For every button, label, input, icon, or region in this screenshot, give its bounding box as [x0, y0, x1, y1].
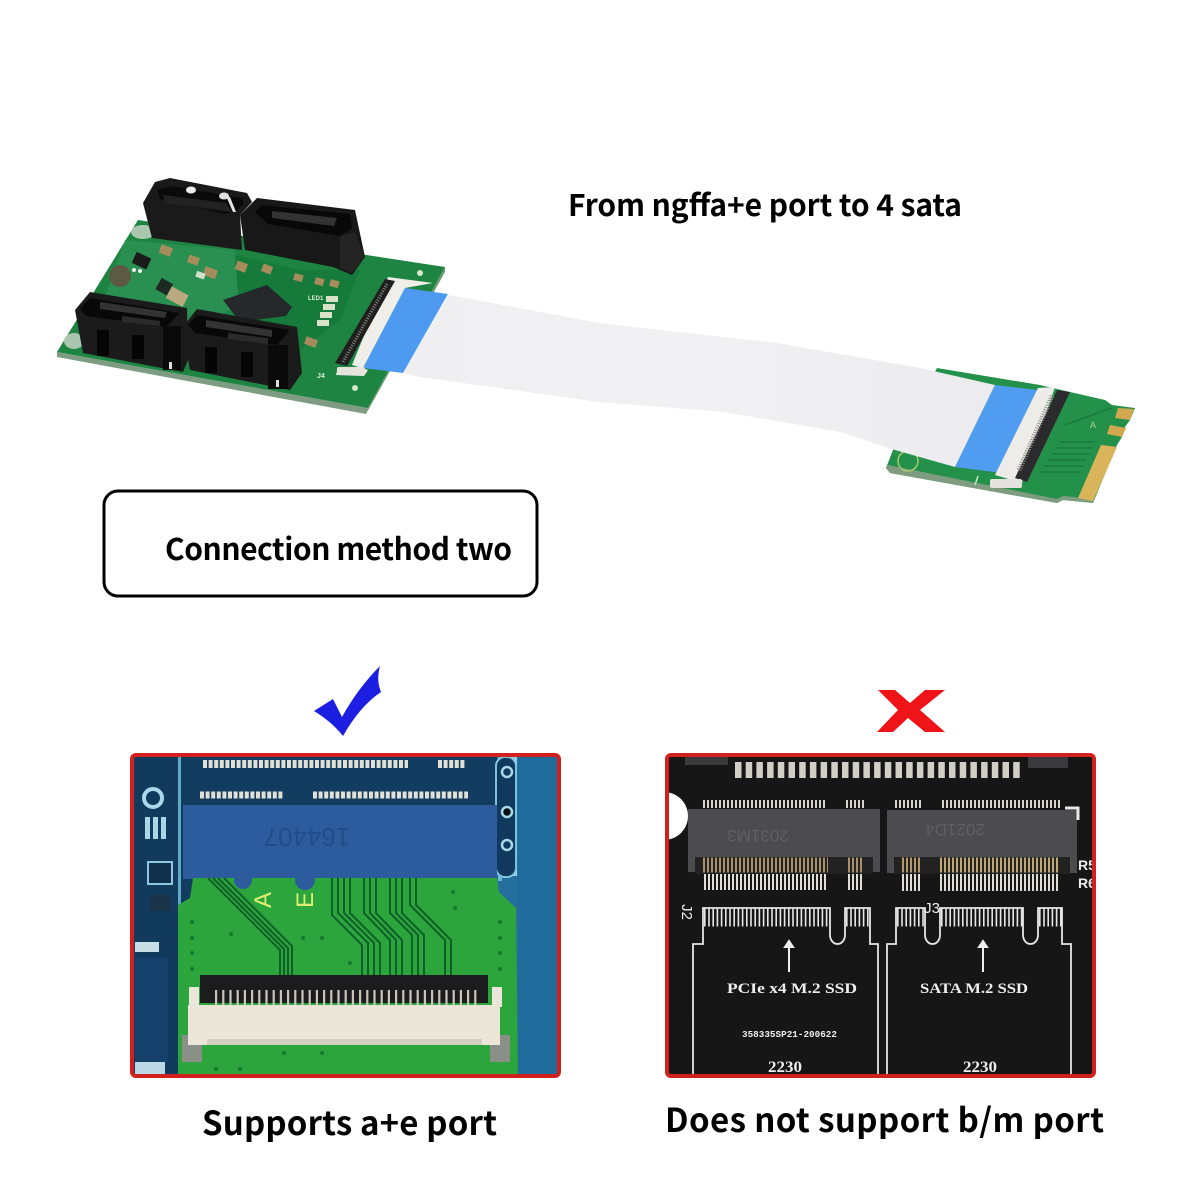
icon: blue check mark [314, 666, 381, 736]
silkscreen letter A: A [250, 892, 277, 908]
ribbon cable [363, 288, 1038, 473]
product photo: adapter with ribbon cable [57, 178, 1135, 503]
SATA port: bottom left [75, 292, 188, 372]
mounting notch [669, 792, 688, 840]
silkscreen: R5: R5 [1078, 857, 1096, 873]
green A+E board [178, 878, 518, 1075]
FFC connector top view [200, 975, 488, 1003]
caption: unsupported port: Does not support b/m port [665, 1094, 1104, 1142]
arrow: SATA insertion [979, 941, 987, 972]
silkscreen: R6: R6 [1078, 875, 1096, 891]
panel: supported a+e port photo [132, 755, 559, 1076]
M.2 socket: right [887, 808, 1078, 874]
FFC connector: left [335, 277, 433, 376]
top connector pads [735, 762, 1020, 778]
caption: supported port: Supports a+e port [202, 1097, 497, 1145]
M.2 socket: left [688, 809, 880, 874]
cable blue stiffener: right [955, 385, 1038, 473]
SATA adapter board [57, 220, 445, 414]
SATA port: top right [240, 198, 365, 275]
slot marking: 164407 [264, 822, 350, 852]
silkscreen: J2: J2 [678, 904, 695, 920]
silkscreen: 2230 left: 2230 [768, 1059, 802, 1076]
silkscreen letter E: E [292, 892, 319, 908]
silkscreen: SATA label: SATA M.2 SSD [920, 981, 1028, 997]
cable blue stiffener: left [363, 288, 448, 373]
icon: red cross [877, 690, 945, 732]
socket marking: 2031M3 [727, 826, 789, 845]
via dots [192, 892, 500, 1069]
panel: unsupported b/m port photo [640, 755, 1096, 1080]
callout: connection method: Connection method two [165, 525, 512, 569]
SATA port: top left [143, 178, 252, 250]
callout: connection method [104, 491, 537, 596]
heading: product description: From ngffa+e port to 4 sata [568, 181, 962, 225]
silkscreen: part number: 358335SP21-200622 [742, 1030, 837, 1040]
socket marking: 2021D4 [925, 820, 985, 839]
FFC connector: right [990, 387, 1070, 488]
silkscreen: PCIe label: PCIe x4 M.2 SSD [727, 981, 857, 997]
silkscreen: J3: J3 [924, 900, 940, 917]
silkscreen: J4: J4 [317, 373, 325, 380]
card footprint: PCIe [693, 908, 878, 1080]
blue M.2 slot [183, 805, 497, 879]
arrow: PCIe insertion [785, 941, 793, 972]
traces: right group [332, 878, 451, 975]
silkscreen: 2230 right: 2230 [963, 1059, 997, 1076]
SATA port: bottom right [182, 309, 302, 390]
silkscreen: A E: A [1090, 420, 1096, 430]
traces: left group [208, 878, 292, 975]
silkscreen: LED labels: LED1 [308, 296, 324, 302]
card footprint: SATA [887, 908, 1071, 1080]
M.2 A+E edge board [886, 368, 1135, 503]
